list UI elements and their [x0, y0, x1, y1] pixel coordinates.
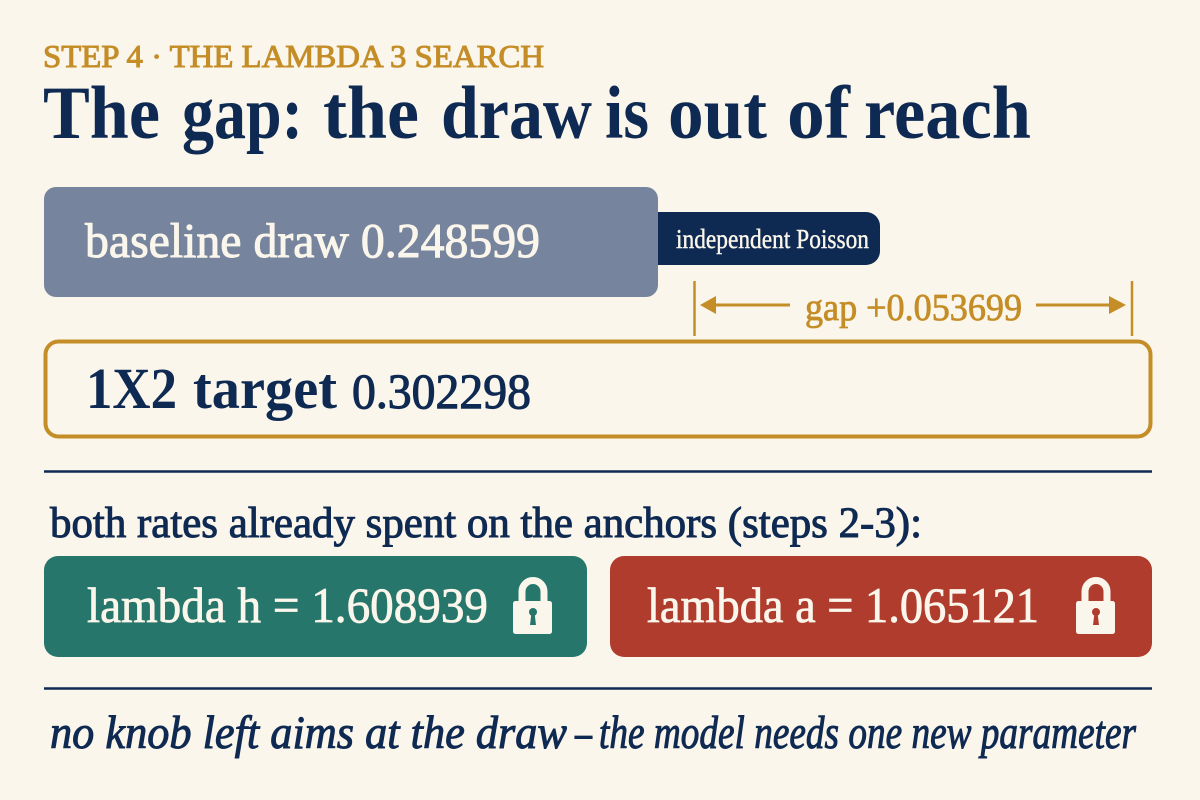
1X2 target bar	[46, 342, 1150, 436]
conclusion text: –	[574, 707, 592, 759]
title: gap:	[182, 72, 303, 155]
title: is	[605, 72, 649, 155]
baseline draw bar: baseline draw 0.248599	[85, 213, 540, 268]
conclusion text: no knob left aims at the draw	[50, 707, 567, 759]
anchors caption: both rates already spent on the anchors (steps 2-3):	[50, 500, 922, 547]
1X2 target bar: target	[193, 356, 338, 421]
title: of	[787, 72, 851, 155]
conclusion text	[50, 707, 1137, 759]
panel: lambda a locked: lambda a = 1.065121	[647, 577, 1039, 633]
title: The	[43, 72, 160, 155]
title: draw	[441, 72, 592, 155]
icon: padlock	[513, 580, 552, 634]
panel: lambda a locked	[610, 556, 1152, 657]
1X2 target bar: 0.302298	[352, 363, 531, 419]
1X2 target bar: 1X2	[86, 356, 177, 421]
title: reach	[864, 72, 1031, 155]
panel: lambda h locked	[44, 556, 587, 657]
gap dimension arrow	[694, 281, 1132, 336]
panel: lambda h locked: lambda h = 1.608939	[87, 577, 488, 633]
icon: padlock	[1076, 580, 1115, 634]
baseline draw bar	[44, 187, 658, 297]
title: out	[668, 72, 767, 155]
independent Poisson tag: independent Poisson	[676, 224, 869, 254]
independent Poisson tag	[650, 212, 880, 265]
title	[43, 72, 1031, 155]
title: the	[323, 72, 419, 155]
gap dimension arrow: gap +0.053699	[805, 287, 1022, 329]
eyebrow: step label: STEP 4 · THE LAMBDA 3 SEARCH	[43, 38, 544, 74]
